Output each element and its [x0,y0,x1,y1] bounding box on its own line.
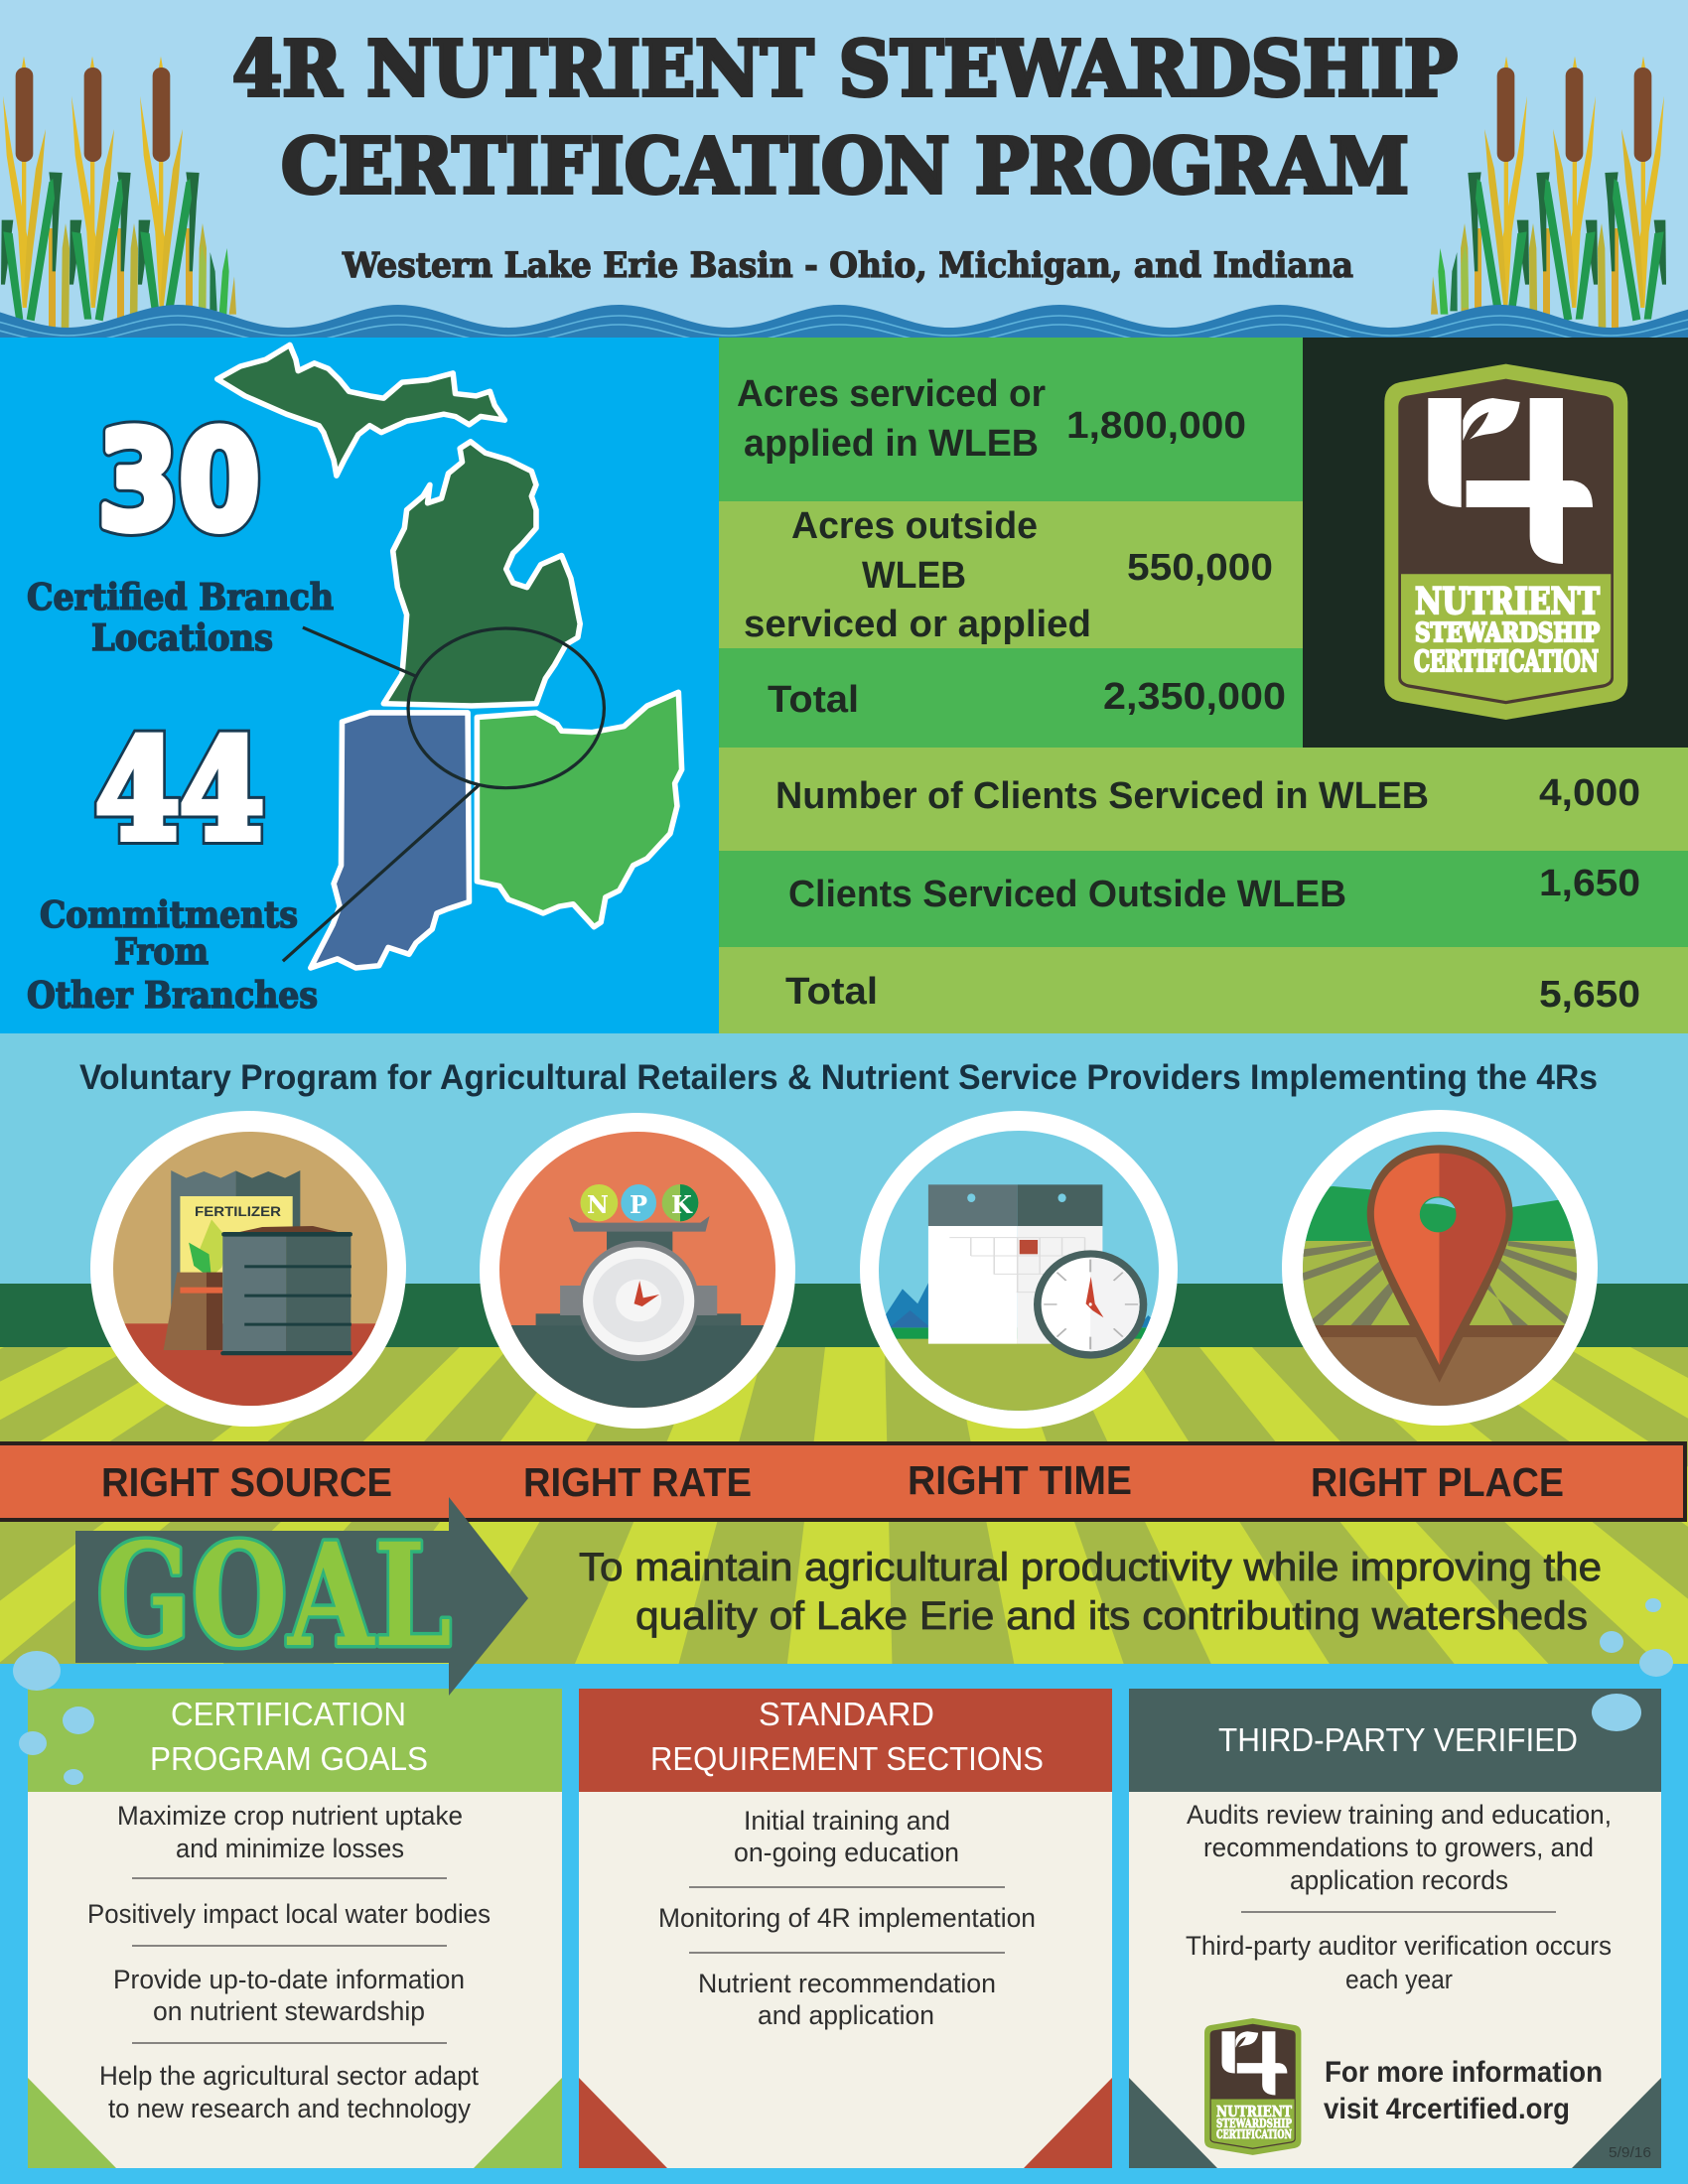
water waves [0,305,1688,343]
label: commitments from other branches: From [114,931,209,973]
badge wording [1414,581,1600,678]
lower Michigan [383,442,580,706]
acres in WLEB: 1,800,000 [1066,405,1246,447]
goals list: to new research and technology [108,2094,471,2123]
goal statement: quality of Lake Erie and its contributing watersheds [635,1594,1588,1638]
small badge wording: NUTRIENT [1216,2103,1293,2120]
NPK letters: N [587,1190,609,1219]
label: commitments from other branches [27,894,318,1017]
logo: small badge [1204,2018,1301,2155]
panel: client stats [719,748,1688,1033]
icon: right place [1282,1110,1598,1444]
verification list: Audits review training and education, [1187,1800,1612,1830]
requirements list: Monitoring of 4R implementation [658,1903,1036,1933]
requirements list: on-going education [734,1838,959,1867]
more information callout: visit 4rcertified.org [1324,2093,1570,2125]
label: certified branch locations [27,577,334,659]
Ohio [477,692,682,927]
section heading: Voluntary Program for Agricultural Retailers & Nutrient Service Providers Implementing the 4Rs [79,1058,1598,1097]
fertilizer bag label: FERTILIZER [195,1203,281,1219]
header [650,1696,1044,1777]
acres outside WLEB [744,505,1273,645]
label: right rate: RIGHT RATE [523,1459,752,1505]
label: right source: RIGHT SOURCE [101,1459,392,1505]
Indiana [311,713,469,968]
header: CERTIFICATION [171,1696,406,1732]
acres outside WLEB: Acres outside [791,505,1038,547]
acres outside WLEB: WLEB [862,555,966,597]
acres in WLEB: applied in WLEB [744,423,1039,465]
watershed ellipse and leader lines [283,627,604,961]
lower background [0,1664,1688,2184]
clients total: Total [785,971,878,1013]
header: STANDARD [759,1696,934,1732]
goals list [87,1801,491,2123]
NPK letters: P [630,1190,647,1219]
acres total: 2,350,000 [1103,676,1286,718]
label: right time: RIGHT TIME [908,1457,1132,1503]
clients in WLEB: Number of Clients Serviced in WLEB [775,775,1429,817]
icon: right rate [480,1113,795,1429]
icon: cattails left [1,57,236,330]
title: CERTIFICATION PROGRAM [281,122,1409,211]
goals list: and minimize losses [176,1834,404,1863]
small badge wording [1216,2103,1293,2141]
requirements list: Initial training and [744,1806,950,1836]
verification list: recommendations to growers, and [1203,1833,1594,1862]
badge wording: NUTRIENT [1415,581,1600,622]
horizon tree line [0,1284,1688,1348]
header: REQUIREMENT SECTIONS [650,1740,1044,1777]
upper Michigan [217,344,504,476]
clients total [785,971,1640,1016]
goals list: Maximize crop nutrient uptake [117,1801,463,1831]
small badge wording: CERTIFICATION [1216,2127,1292,2141]
panel: third-party verified [1129,1689,1661,2168]
clients outside WLEB [788,863,1640,915]
acres total: Total [768,679,859,721]
panel: certification program goals [28,1689,562,2168]
icon: right time [854,1111,1179,1444]
icon: right source [90,1111,414,1442]
number 30: 30 [97,403,260,561]
label: certified branch locations: Locations [91,617,273,659]
acres outside WLEB: 550,000 [1127,547,1273,589]
goals list: Help the agricultural sector adapt [99,2061,479,2091]
badge wording: CERTIFICATION [1414,644,1599,678]
goals list: Provide up-to-date information [113,1965,465,1994]
icon: cattails right [1431,57,1666,330]
number 44: 44 [95,709,264,871]
requirements list: Nutrient recommendation [698,1969,996,1998]
requirements list: and application [758,2000,934,2030]
goals list: on nutrient stewardship [153,1996,425,2026]
number 30: 30 [97,403,260,561]
more information callout: For more information [1325,2056,1603,2089]
panel: acres stats [719,338,1303,748]
goal arrow [75,1497,528,1696]
panel: badge background [1303,338,1688,748]
panel: map [0,338,719,1033]
goal word: GOAL [96,1512,452,1679]
clients outside WLEB: 1,650 [1539,863,1640,904]
verification list: application records [1290,1865,1508,1895]
clients in WLEB: 4,000 [1539,772,1640,814]
panel: standard requirement sections [579,1689,1112,2168]
clients total: 5,650 [1539,974,1640,1016]
logo: 4R badge [1384,364,1627,720]
verification list [1186,1800,1612,1994]
striped field [0,1347,1688,1688]
acres total [768,676,1286,721]
acres outside WLEB: serviced or applied [744,604,1091,645]
acres in WLEB [737,373,1246,465]
date stamp: 5/9/16 [1609,2144,1651,2161]
header: THIRD-PARTY VERIFIED [1218,1721,1578,1758]
title: 4R NUTRIENT STEWARDSHIP [232,25,1458,114]
more information callout [1324,2056,1603,2125]
goals list: Positively impact local water bodies [87,1899,491,1929]
header: PROGRAM GOALS [150,1740,428,1777]
label: right place: RIGHT PLACE [1311,1459,1564,1505]
header [150,1696,428,1777]
clients outside WLEB: Clients Serviced Outside WLEB [788,874,1346,915]
requirements list [658,1806,1036,2030]
subtitle: Western Lake Erie Basin - Ohio, Michigan, and Indiana [342,245,1353,286]
goal statement [579,1546,1602,1638]
acres in WLEB: Acres serviced or [737,373,1046,415]
label: commitments from other branches: Other Branches [27,975,318,1017]
badge wording: STEWARDSHIP [1415,618,1600,648]
map of Michigan, Indiana and Ohio [217,344,682,968]
verification list: each year [1345,1965,1453,1994]
goal statement: To maintain agricultural productivity while improving the [579,1546,1602,1589]
verification list: Third-party auditor verification occurs [1186,1931,1612,1961]
bubbles [13,1598,1673,1785]
NPK letters: K [671,1190,693,1219]
title [232,25,1458,211]
number 44: 44 [95,709,264,871]
label: certified branch locations: Certified Branch [27,577,334,618]
sky band [0,1033,1688,1285]
header background [0,0,1688,338]
small badge wording: STEWARDSHIP [1216,2116,1292,2130]
NPK letters [587,1190,693,1219]
banner: four rights [0,1443,1685,1520]
label: commitments from other branches: Commitments [40,894,298,936]
